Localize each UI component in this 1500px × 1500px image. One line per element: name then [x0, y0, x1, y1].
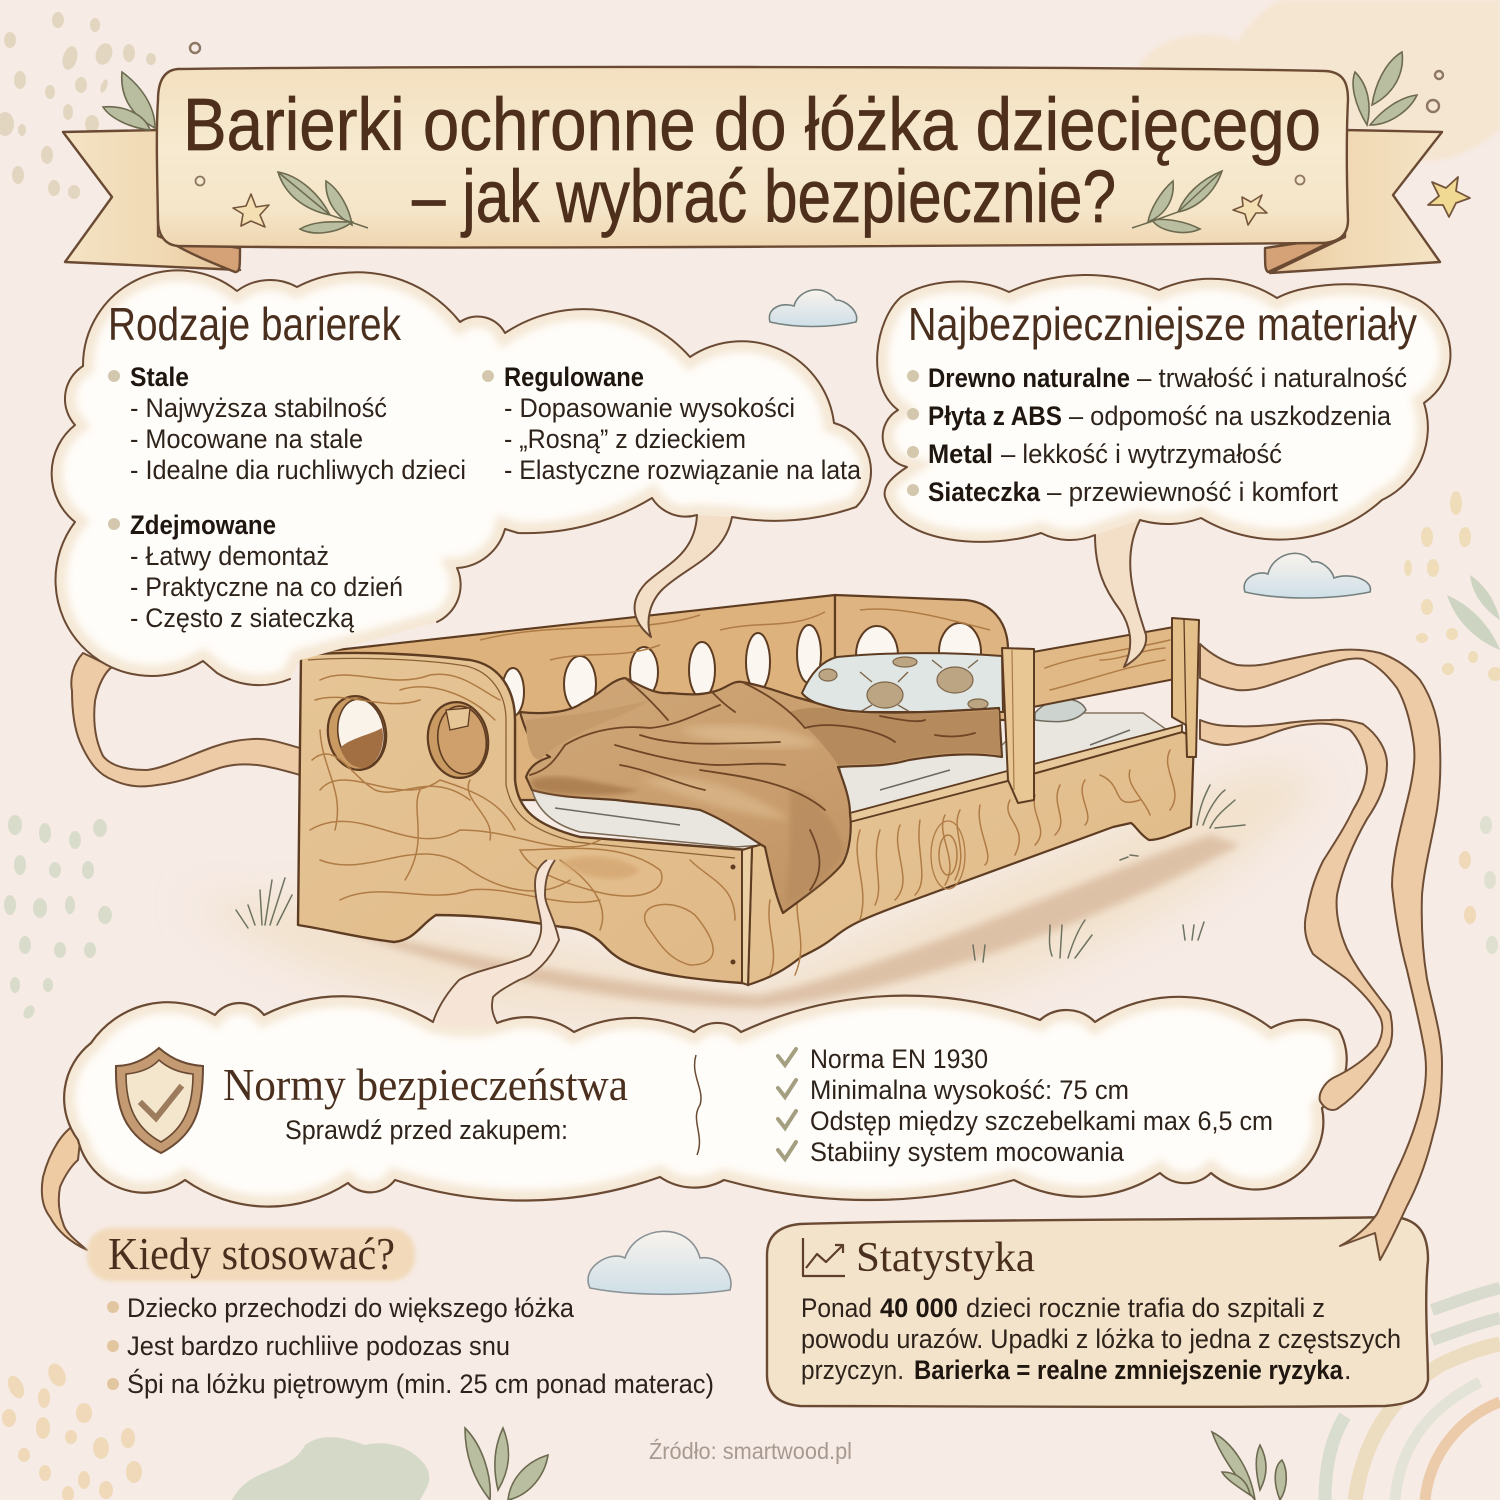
blanket — [520, 678, 1002, 913]
bed illustration — [298, 595, 1199, 985]
cloud icon: top — [769, 290, 857, 326]
text: statistics: Ponad — [801, 1293, 872, 1323]
list: when to use — [107, 1293, 714, 1399]
heading: types: Rodzaje barierek — [108, 298, 402, 350]
stars — [233, 194, 269, 227]
decorative dots: bottom left — [2, 1361, 142, 1500]
banner leaf left — [278, 172, 368, 233]
icon: chart — [803, 1238, 845, 1276]
title banner — [63, 52, 1470, 273]
ribbon: norms to when — [42, 1122, 87, 1250]
list: fixed: - Mocowane na stale — [130, 424, 363, 454]
list: materials: – odpomość na uszkodzenia — [1069, 401, 1392, 431]
head panel holes — [323, 692, 391, 774]
text: statistics — [801, 1293, 1401, 1385]
bed rail — [1002, 618, 1199, 803]
ribbon: rail to statistics — [1200, 644, 1442, 1260]
decorative dots and leaves: right side — [1404, 491, 1500, 954]
list: materials: – trwałość i naturalność — [1137, 363, 1407, 393]
pillow — [802, 653, 1003, 712]
source: Źródło: smartwood.pl — [649, 1438, 852, 1464]
bed back panel — [300, 595, 835, 800]
text: statistics: Barierka = realne zmniejszenie ryzyka — [914, 1355, 1344, 1385]
banner body — [157, 67, 1348, 248]
list: adjustable: - Dopasowanie wysokości — [504, 393, 795, 423]
ribbon: bed front to norms — [433, 860, 559, 1026]
list: when to use: Śpi na lóżku piętrowym (min. 25 cm ponad materac) — [127, 1367, 714, 1399]
list: removable: - Łatwy demontaż — [130, 541, 329, 571]
list: adjustable: - „Rosną” z dzieckiem — [504, 424, 746, 454]
checklist: Stabiiny system mocowania — [810, 1137, 1125, 1167]
back panel holes — [502, 623, 981, 716]
list: removable — [108, 510, 403, 633]
icon: shield — [116, 1048, 203, 1153]
heading: safety: Normy bezpieczeństwa — [223, 1059, 628, 1110]
banner leaf right — [1132, 171, 1222, 232]
title: Barierki ochronne do łóżka dziecięcego — [183, 83, 1321, 166]
panel: types of barriers — [40, 250, 900, 690]
wood grain — [310, 674, 603, 930]
subheading: check before purchase: Sprawdź przed zakupem: — [285, 1115, 568, 1145]
banner tail: right — [1270, 130, 1442, 273]
heading: statistics: Statystyka — [856, 1235, 1035, 1281]
panel: statistics — [767, 1217, 1428, 1407]
panel: safety standards — [63, 994, 1348, 1208]
panel: materials — [876, 274, 1452, 668]
text: statistics: przyczyn. — [801, 1355, 904, 1385]
decorative watercolor bush: bottom — [232, 1437, 429, 1500]
cloud icon: bottom — [588, 1231, 731, 1294]
list: fixed: - Najwyższa stabilność — [130, 393, 387, 423]
dark right folds — [790, 708, 1000, 765]
list: materials: – lekkość i wytrzymałość — [1001, 439, 1282, 469]
list: fixed: Stale — [130, 362, 189, 392]
text: statistics: 40 000 — [880, 1293, 958, 1323]
list: materials: Metal — [928, 439, 993, 469]
checklist: Norma EN 1930 — [810, 1044, 988, 1074]
decorative rainbow: bottom right — [1325, 1288, 1500, 1500]
panel: when to use — [87, 1228, 714, 1399]
bed head panel — [298, 653, 752, 985]
list: adjustable — [482, 362, 862, 485]
list: when to use: Dziecko przechodzi do większego łóżka — [127, 1293, 575, 1323]
decorative dots: top left — [0, 12, 156, 199]
list: materials: – przewiewność i komfort — [1047, 477, 1338, 507]
decorative leaves: bottom — [465, 1428, 1286, 1500]
bed side panel — [748, 725, 1194, 985]
list: removable: - Praktyczne na co dzień — [130, 572, 403, 602]
small clouds — [769, 290, 857, 326]
list: fixed: - Idealne dia ruchliwych dzieci — [130, 455, 466, 485]
small circles — [190, 43, 1443, 112]
banner tail: left — [63, 130, 240, 270]
checklist: Minimalna wysokość: 75 cm — [810, 1075, 1129, 1105]
list: materials: Płyta z ABS — [928, 401, 1062, 431]
list: removable: Zdejmowane — [130, 510, 276, 540]
checklist — [778, 1044, 1273, 1167]
heading: when to use: Kiedy stosować? — [108, 1228, 395, 1279]
list: materials: Siateczka — [928, 477, 1041, 507]
heading: materials: Najbezpieczniejsze materiały — [908, 298, 1417, 350]
list: materials: Drewno naturalne — [928, 363, 1130, 393]
ribbon: rail to norms — [1200, 720, 1392, 1110]
checklist: Odstęp między szczebelkami max 6,5 cm — [810, 1106, 1273, 1136]
leaves: top corners of the banner — [103, 52, 1417, 130]
ribbon: left from types cloud to bed — [71, 653, 300, 786]
list: materials — [907, 363, 1407, 507]
list: removable: - Często z siateczką — [130, 603, 355, 633]
list: adjustable: Regulowane — [504, 362, 644, 392]
edge strip — [742, 847, 752, 985]
ground under bed — [190, 769, 1316, 1021]
list: adjustable: - Elastyczne rozwiązanie na lata — [504, 455, 862, 485]
decorative dots: left middle — [4, 815, 112, 1021]
text: statistics: . — [1344, 1355, 1352, 1385]
title banner: – jak wybrać bezpiecznie? — [412, 155, 1116, 238]
grass tufts — [236, 785, 1245, 962]
list: when to use: Jest bardzo ruchliive podozas snu — [127, 1331, 510, 1361]
decorative wash: top right — [1138, 0, 1500, 161]
heading highlight — [87, 1228, 415, 1281]
mattress — [532, 699, 1167, 847]
cloud icon: right — [1244, 553, 1370, 598]
text: statistics: powodu urazów. Upadki z lóżka to jedna z częstszych — [801, 1324, 1401, 1354]
list: fixed — [108, 362, 466, 485]
text: statistics: dzieci rocznie trafia do szpitali z — [966, 1293, 1325, 1323]
